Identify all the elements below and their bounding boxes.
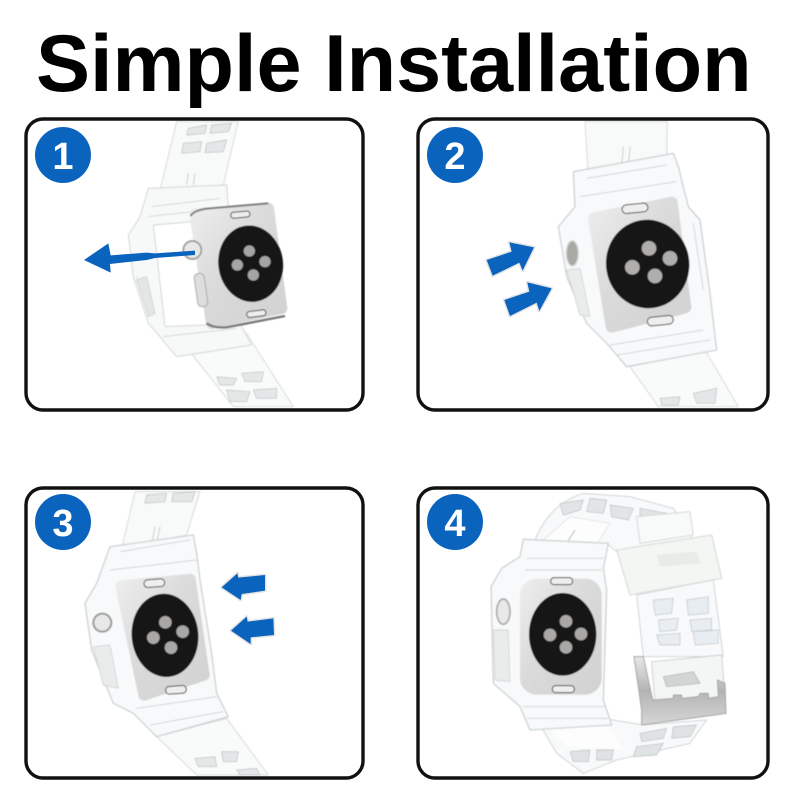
panel: step 3	[26, 488, 363, 778]
panel: step 2	[418, 119, 768, 410]
arrows: push left	[222, 573, 274, 644]
badge: number 1: 1	[52, 136, 74, 178]
illustration: pressing watch into case	[85, 492, 274, 775]
arrows: push right	[487, 242, 552, 316]
panel: step 4	[418, 488, 768, 778]
badge: number 3: 3	[52, 503, 74, 545]
illustration: watch sliding out of clear case	[84, 122, 293, 407]
panel: step 1	[26, 119, 363, 410]
illustration: finished watch with clear band and buckle	[491, 493, 726, 773]
badge: number 1	[35, 127, 91, 183]
badge: number 4	[427, 494, 483, 550]
badge: number 2	[427, 127, 483, 183]
badge: number 2: 2	[444, 136, 466, 178]
badge: number 4: 4	[444, 503, 466, 545]
arrow: pull left	[84, 243, 195, 273]
badge: number 3	[35, 494, 91, 550]
title: Simple Installation	[36, 19, 752, 109]
illustration: watch placed in clear case	[487, 122, 738, 407]
